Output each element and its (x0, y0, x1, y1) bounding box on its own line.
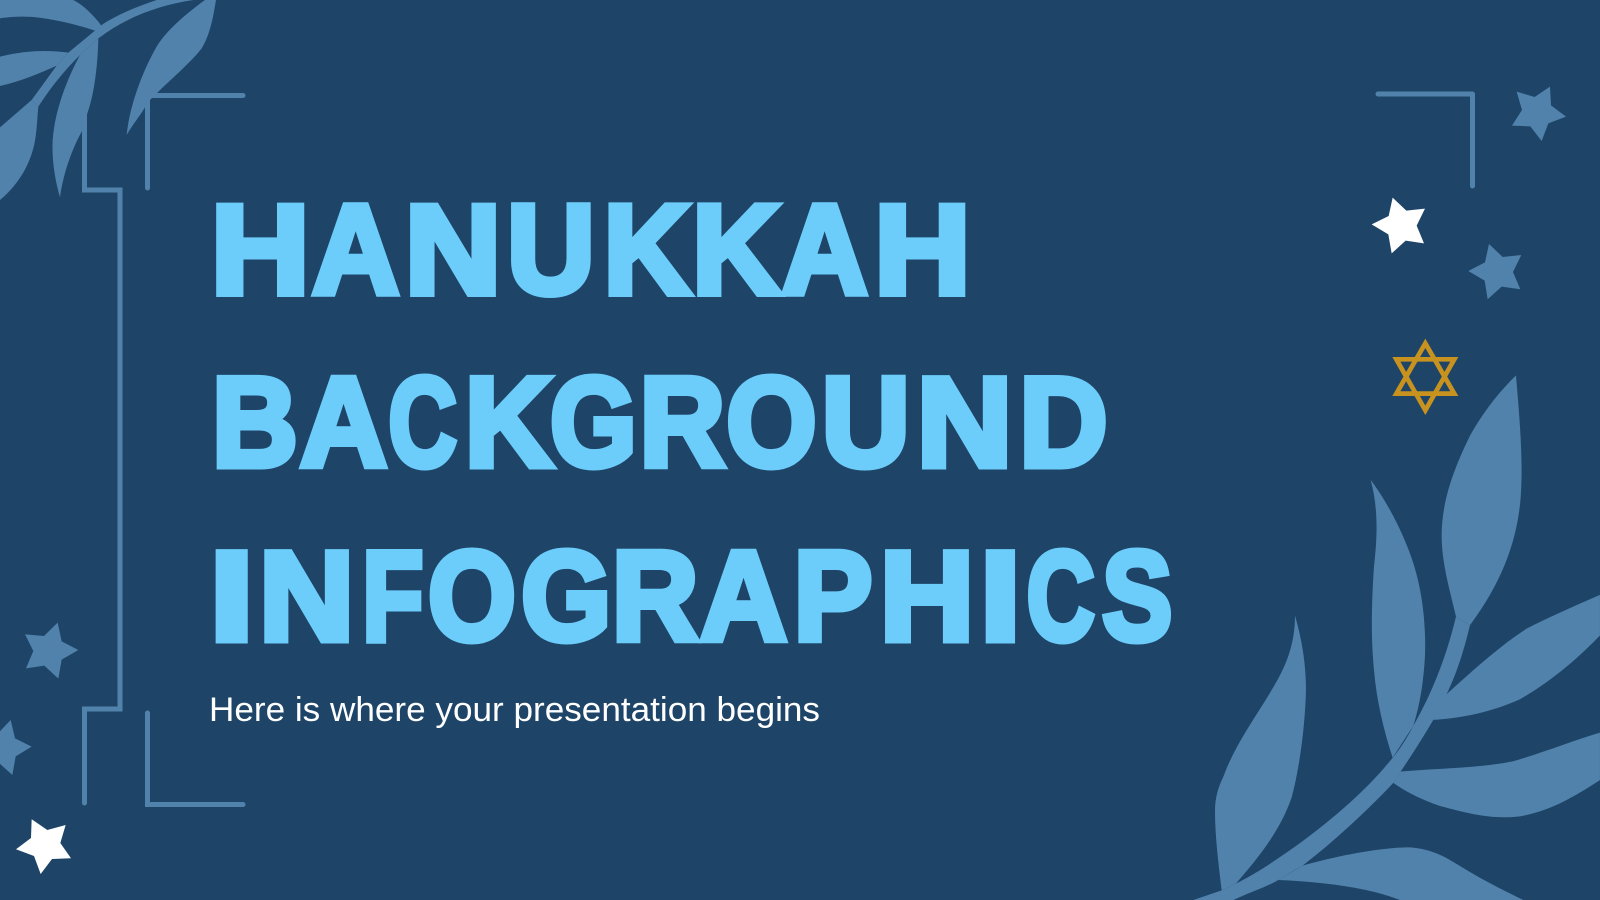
title line 3: I (980, 525, 1021, 667)
title line 1: H (874, 178, 971, 320)
corner bracket: bottom left (148, 713, 243, 804)
title line 3: O (428, 525, 516, 667)
title line 1: K (604, 178, 690, 320)
title line 3: C (1027, 525, 1095, 667)
title line 3: S (1102, 525, 1172, 667)
title line 2: K (465, 351, 552, 493)
title line 2: R (640, 351, 725, 493)
leaf branch: top left (0, 0, 216, 200)
title line 3: F (362, 525, 423, 667)
title line 1: H (211, 178, 310, 320)
title line 3: R (612, 525, 698, 667)
title line 2: O (726, 351, 817, 493)
corner bracket: top right (1378, 94, 1472, 186)
corner bracket: top left (148, 96, 243, 188)
title line 2: U (822, 351, 910, 493)
title line 3: P (794, 525, 872, 667)
icon: blue star left (25, 623, 78, 679)
leaf branch: bottom right (1193, 375, 1600, 900)
title line 2: G (550, 351, 637, 493)
icon: star of David (1396, 343, 1454, 410)
outer left frame line (84, 113, 120, 803)
title line 3: N (259, 525, 354, 667)
title line 3: H (880, 525, 974, 667)
title line 2: C (388, 351, 457, 493)
title line 1: A (312, 178, 399, 320)
icon: blue star cut off at left edge (0, 720, 32, 775)
title line 2: B (212, 351, 298, 493)
title line 2: N (917, 351, 1012, 493)
icon: blue star top right (1512, 87, 1566, 141)
icon: blue star right (1468, 244, 1521, 299)
title line 1: N (405, 178, 501, 320)
icon: white star bottom left (16, 819, 71, 874)
title line 2: D (1019, 351, 1108, 493)
title (209, 178, 1172, 667)
title line 3: A (700, 525, 787, 667)
icon: white star right (1372, 198, 1425, 253)
title line 2: A (300, 351, 387, 493)
title line 1: K (692, 178, 780, 320)
title line 3: I (209, 525, 254, 667)
title line 1: A (782, 178, 868, 320)
title line 3: G (521, 525, 611, 667)
title line 1: U (507, 178, 595, 320)
subtitle: Here is where your presentation begins (209, 691, 820, 729)
